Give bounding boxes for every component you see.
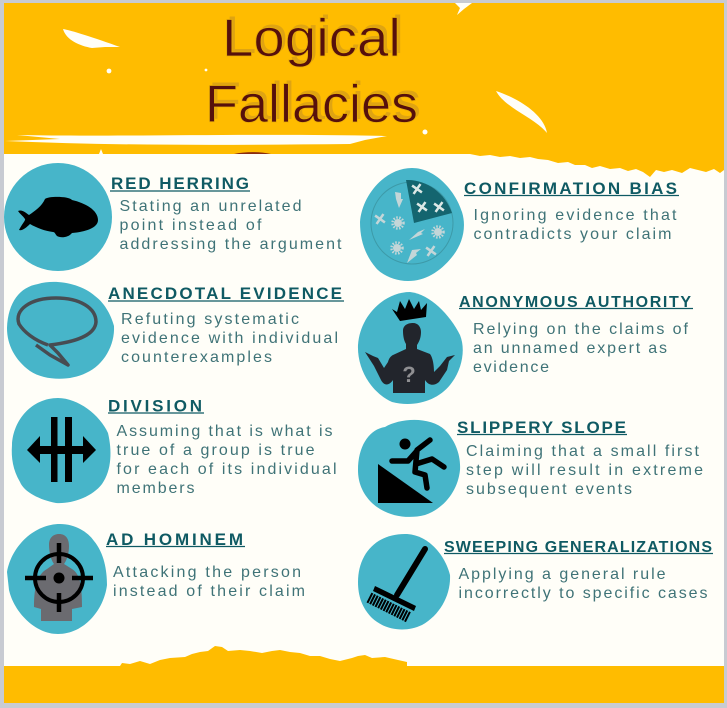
panel: anecdotal evidence [7, 282, 344, 379]
description: red herring [120, 198, 342, 253]
header banner [4, 3, 724, 177]
icon: pie with symbols [360, 168, 464, 281]
description: anonymous authority: an unnamed expert as [473, 340, 667, 357]
description: sweeping generalizations [458, 566, 708, 602]
description: division: for each of its individual [116, 461, 336, 478]
icon: speech bubble [7, 282, 114, 379]
footer banner [4, 646, 724, 703]
description: sweeping generalizations: Applying a general rule [458, 566, 666, 583]
title: Fallacies [208, 72, 421, 131]
description: anonymous authority: Relying on the claims of [473, 321, 689, 338]
description: sweeping generalizations: incorrectly to specific cases [458, 585, 708, 602]
title: Logical [225, 6, 404, 65]
description: slippery slope: step will result in extreme [466, 462, 703, 479]
description: division [116, 423, 336, 497]
description: division: members [116, 480, 194, 497]
description: red herring: addressing the argument [120, 236, 342, 253]
icon: crowned anonymous figure: ? [402, 362, 416, 387]
heading: anonymous authority: ANONYMOUS AUTHORITY [459, 294, 691, 311]
heading: confirmation bias: CONFIRMATION BIAS [464, 179, 677, 198]
icon: broom [358, 534, 450, 629]
title: Logical [222, 9, 401, 68]
description: division: Assuming that is what is [116, 423, 332, 440]
heading: slippery slope: SLIPPERY SLOPE [457, 418, 626, 437]
icon: target on person [7, 524, 107, 634]
description: anecdotal evidence: evidence with individual [121, 330, 338, 347]
description: anonymous authority [473, 321, 689, 376]
description: slippery slope [466, 443, 703, 498]
description: division: true of a group is true [116, 442, 315, 459]
icon: division arrows [12, 398, 110, 503]
icon: person falling on slope [358, 420, 460, 517]
heading: division: DIVISION [108, 396, 202, 416]
description: anecdotal evidence [121, 311, 338, 366]
panel: confirmation bias [360, 168, 679, 281]
description: ad hominem: Attacking the person [113, 564, 301, 581]
description: confirmation bias [474, 207, 677, 243]
description: red herring: Stating an unrelated [120, 198, 302, 215]
description: ad hominem: instead of their claim [113, 583, 305, 600]
description: red herring: point instead of [120, 217, 262, 234]
description: slippery slope: subsequent events [466, 481, 632, 498]
heading: sweeping generalizations: SWEEPING GENERALIZATIONS [444, 539, 712, 556]
icon: fish [4, 163, 112, 271]
heading: ad hominem: AD HOMINEM [106, 530, 243, 549]
description: confirmation bias: Ignoring evidence that [474, 207, 677, 224]
title: Fallacies [205, 75, 418, 134]
panel: sweeping generalizations [358, 534, 713, 629]
description: anecdotal evidence: counterexamples [121, 349, 272, 366]
panel: division [12, 396, 336, 503]
icon: crowned anonymous figure [358, 292, 463, 404]
description: confirmation bias: contradicts your claim [474, 226, 672, 243]
panel: anonymous authority [358, 292, 693, 404]
description: ad hominem [113, 564, 305, 600]
description: anecdotal evidence: Refuting systematic [121, 311, 299, 328]
description: slippery slope: Claiming that a small first [466, 443, 700, 460]
panel: ad hominem [7, 524, 305, 634]
panel: red herring [4, 163, 342, 271]
heading: anecdotal evidence: ANECDOTAL EVIDENCE [108, 284, 342, 303]
description: anonymous authority: evidence [473, 359, 549, 376]
panel: slippery slope [358, 418, 703, 517]
heading: red herring: RED HERRING [111, 174, 249, 193]
title [205, 6, 421, 134]
